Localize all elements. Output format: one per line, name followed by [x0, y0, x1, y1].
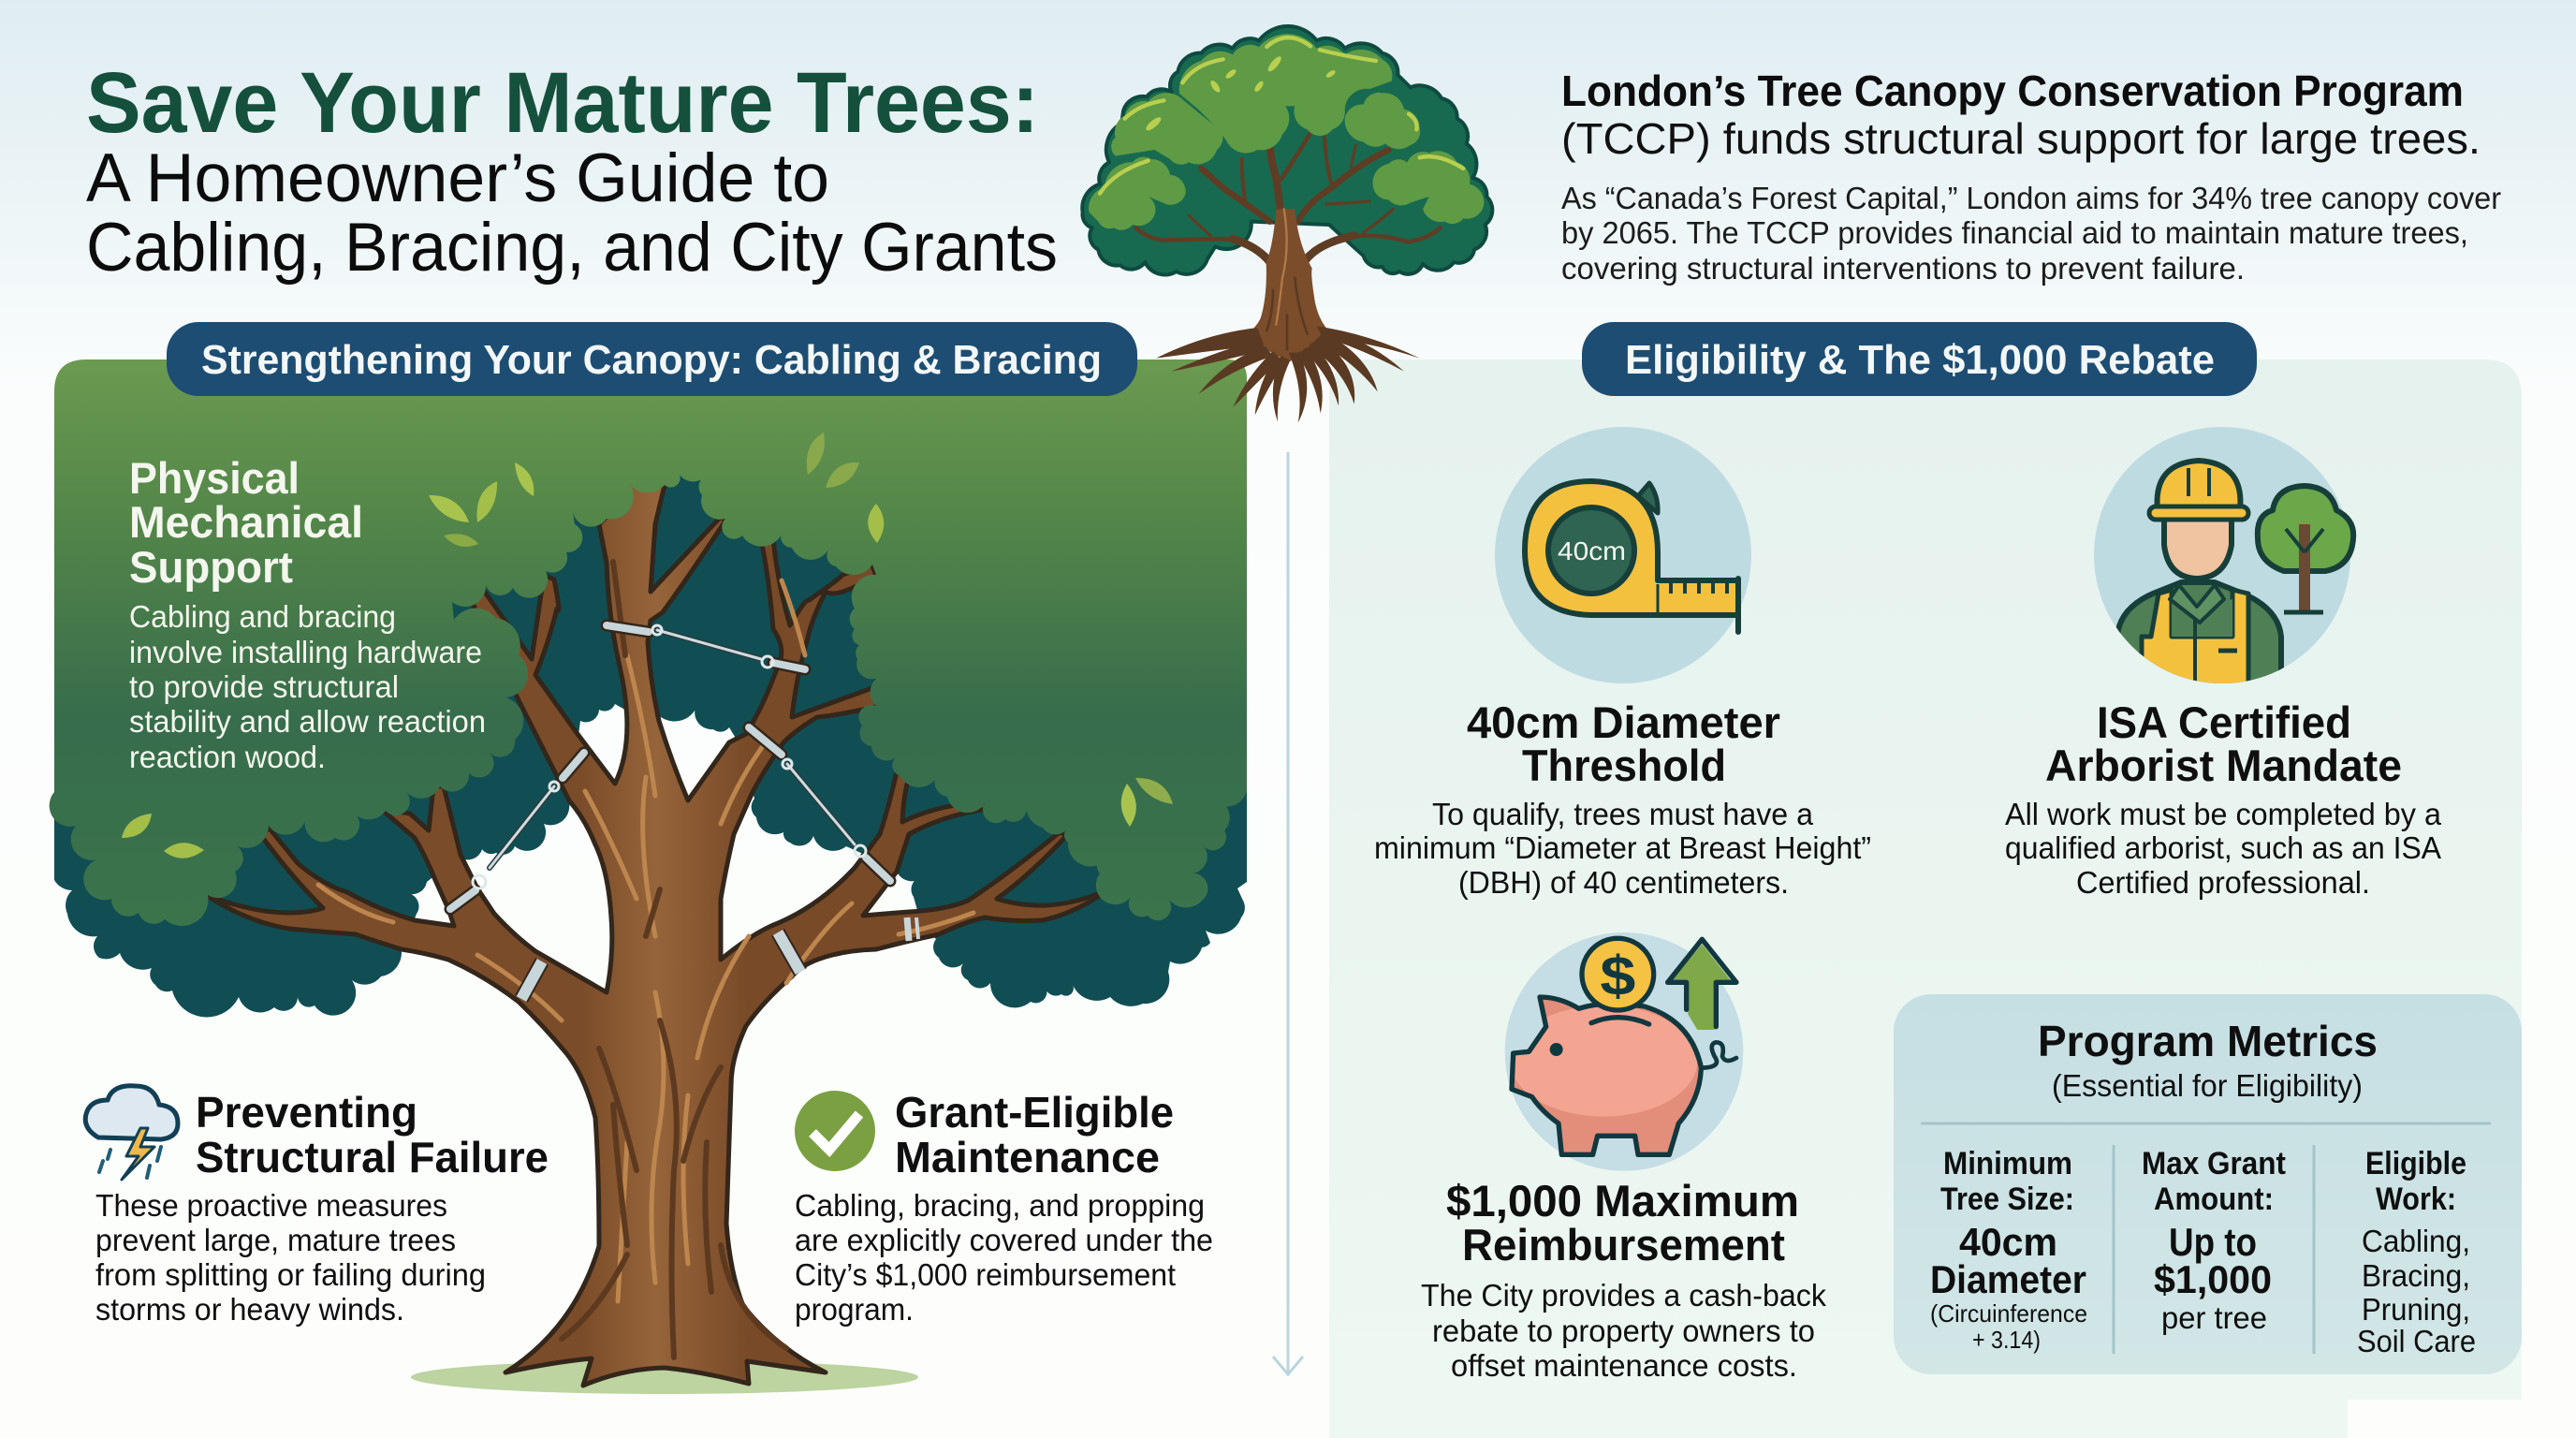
text block: grant-eligible maintenance: Grant-Eligible [895, 1088, 1174, 1137]
text block: isa certified arborist mandate: Certified professional. [2076, 865, 2370, 900]
canopy base [1082, 26, 1492, 274]
metrics heading: Program Metrics [2038, 1017, 2378, 1065]
ground shadow [411, 1360, 918, 1394]
section heading pill: eligibility [1582, 322, 2257, 396]
metric: minimum tree size: Diameter [1930, 1257, 2086, 1301]
text block: preventing structural failure [95, 1088, 549, 1327]
text block: grant-eligible maintenance: Maintenance [895, 1133, 1160, 1181]
text block: preventing structural failure: Structural Failure [196, 1133, 549, 1181]
title: Cabling, Bracing, and City Grants [86, 210, 1058, 286]
text block: physical mechanical support: reaction wood. [129, 740, 326, 774]
section heading pill: canopy [167, 322, 1137, 396]
text block: isa certified arborist mandate: qualified arborist, such as an ISA [2005, 830, 2441, 865]
metric: eligible work: Pruning, [2362, 1292, 2470, 1327]
text block: physical mechanical support: involve installing hardware [129, 635, 482, 669]
metric: minimum tree size: (Circuinference [1930, 1299, 2087, 1328]
text block: isa certified arborist mandate [2005, 697, 2442, 900]
metric: max grant amount [2142, 1146, 2286, 1335]
text block: maximum reimbursement: rebate to property owners to [1432, 1313, 1815, 1348]
text block: preventing structural failure: storms or heavy winds. [95, 1292, 404, 1327]
text block: maximum reimbursement: Reimbursement [1462, 1220, 1785, 1269]
text block: maximum reimbursement [1421, 1176, 1826, 1383]
text block: isa certified arborist mandate: All work must be completed by a [2005, 797, 2442, 831]
text block: physical mechanical support: stability and allow reaction [129, 704, 486, 739]
text block: preventing structural failure: Preventing [196, 1088, 417, 1137]
roots [1156, 326, 1420, 423]
text block: physical mechanical support: Mechanical [129, 497, 363, 547]
icon: measuring tape: 40cm [1558, 536, 1626, 565]
metric: eligible work [2357, 1146, 2476, 1358]
text block: grant-eligible maintenance [795, 1088, 1213, 1327]
text block: physical mechanical support: to provide structural [129, 669, 399, 704]
metric: max grant amount: per tree [2161, 1300, 2267, 1335]
text block: grant-eligible maintenance: are explicitly covered under the [795, 1223, 1213, 1257]
metric: minimum tree size: Minimum [1943, 1146, 2072, 1181]
metric: max grant amount: Up to [2169, 1220, 2257, 1264]
branches [1135, 132, 1440, 262]
text block: isa certified arborist mandate: Arborist Mandate [2045, 741, 2402, 790]
text block: grant-eligible maintenance: Cabling, bracing, and propping [795, 1188, 1205, 1223]
metric: eligible work: Eligible [2365, 1146, 2466, 1181]
metrics heading [2038, 1017, 2378, 1103]
icon: storm cloud [85, 1086, 178, 1180]
text block: 40cm diameter threshold: minimum “Diameter at Breast Height” [1374, 830, 1871, 865]
text block: grant-eligible maintenance: program. [795, 1292, 914, 1327]
intro text block: (TCCP) funds structural support for large trees. [1561, 114, 2481, 163]
text block: 40cm diameter threshold: Threshold [1522, 741, 1726, 790]
trunk [1242, 209, 1334, 362]
illustration: header tree [1082, 26, 1492, 423]
hardware: bands and cables [450, 625, 918, 999]
icon: measuring tape [1495, 427, 1751, 683]
text block: 40cm diameter threshold: 40cm Diameter [1467, 697, 1780, 747]
panel: upper green canopy [50, 360, 1247, 926]
text block: 40cm diameter threshold [1374, 697, 1871, 900]
leaves [122, 433, 1173, 858]
text block: physical mechanical support: Cabling and bracing [129, 599, 396, 634]
text block: maximum reimbursement: offset maintenance costs. [1451, 1348, 1797, 1383]
metric: max grant amount: Max Grant [2142, 1146, 2286, 1181]
foliage clumps [1089, 34, 1484, 230]
text block: maximum reimbursement: The City provides a cash-back [1421, 1278, 1826, 1313]
metrics heading: (Essential for Eligibility) [2052, 1068, 2363, 1103]
text block: preventing structural failure: from splitting or failing during [95, 1257, 486, 1292]
title: A Homeowner’s Guide to [86, 140, 829, 216]
trunk and branches [206, 477, 1107, 1386]
metric: eligible work: Work: [2376, 1181, 2456, 1217]
panel: eligibility background [1329, 360, 2522, 1438]
metric: minimum tree size: 40cm [1959, 1220, 2057, 1264]
text block: 40cm diameter threshold: To qualify, trees must have a [1432, 797, 1814, 831]
intro text block: London’s Tree Canopy Conservation Program [1561, 66, 2464, 115]
metric: minimum tree size: + 3.14) [1972, 1326, 2041, 1354]
icon: piggy bank: $ [1600, 944, 1635, 1006]
text block: isa certified arborist mandate: ISA Certified [2097, 697, 2351, 747]
text block: physical mechanical support [129, 453, 486, 774]
metric: eligible work: Soil Care [2357, 1324, 2476, 1358]
text block: preventing structural failure: These proactive measures [95, 1188, 447, 1223]
intro text block: by 2065. The TCCP provides financial aid to maintain mature trees, [1561, 215, 2468, 250]
icon: arborist [2094, 427, 2353, 712]
text block: physical mechanical support: Physical [129, 453, 300, 503]
metric: eligible work: Bracing, [2362, 1258, 2470, 1293]
foliage highlights [1100, 37, 1463, 194]
metric: max grant amount: Amount: [2154, 1181, 2274, 1217]
intro text block [1561, 66, 2501, 286]
intro text block: covering structural interventions to prevent failure. [1561, 251, 2245, 286]
text block: 40cm diameter threshold: (DBH) of 40 centimeters. [1458, 865, 1789, 900]
title: Save Your Mature Trees: [86, 55, 1039, 151]
section heading pill: eligibility: Eligibility & The $1,000 Rebate [1625, 337, 2215, 383]
divider arrow [1273, 452, 1303, 1374]
intro text block: As “Canada’s Forest Capital,” London aims for 34% tree canopy cover [1561, 181, 2501, 215]
text block: maximum reimbursement: $1,000 Maximum [1446, 1176, 1799, 1225]
icon: check badge [795, 1091, 875, 1171]
text block: preventing structural failure: prevent large, mature trees [95, 1223, 456, 1257]
section heading pill: canopy: Strengthening Your Canopy: Cabling & Bracing [201, 337, 1102, 383]
panel: program metrics [1894, 994, 2522, 1374]
metric: eligible work: Cabling, [2362, 1224, 2470, 1258]
text block: grant-eligible maintenance: City’s $1,000 reimbursement [795, 1257, 1176, 1292]
illustration: large tree with cabling [54, 449, 1247, 1394]
title [86, 55, 1058, 286]
bark streaks [318, 562, 973, 1357]
metric: minimum tree size: Tree Size: [1940, 1181, 2074, 1217]
metric: max grant amount: $1,000 [2154, 1257, 2272, 1301]
text block: physical mechanical support: Support [129, 542, 293, 592]
dark canopy [54, 449, 1247, 1017]
icon: piggy bank [1505, 932, 1743, 1171]
metric: minimum tree size [1930, 1146, 2087, 1354]
